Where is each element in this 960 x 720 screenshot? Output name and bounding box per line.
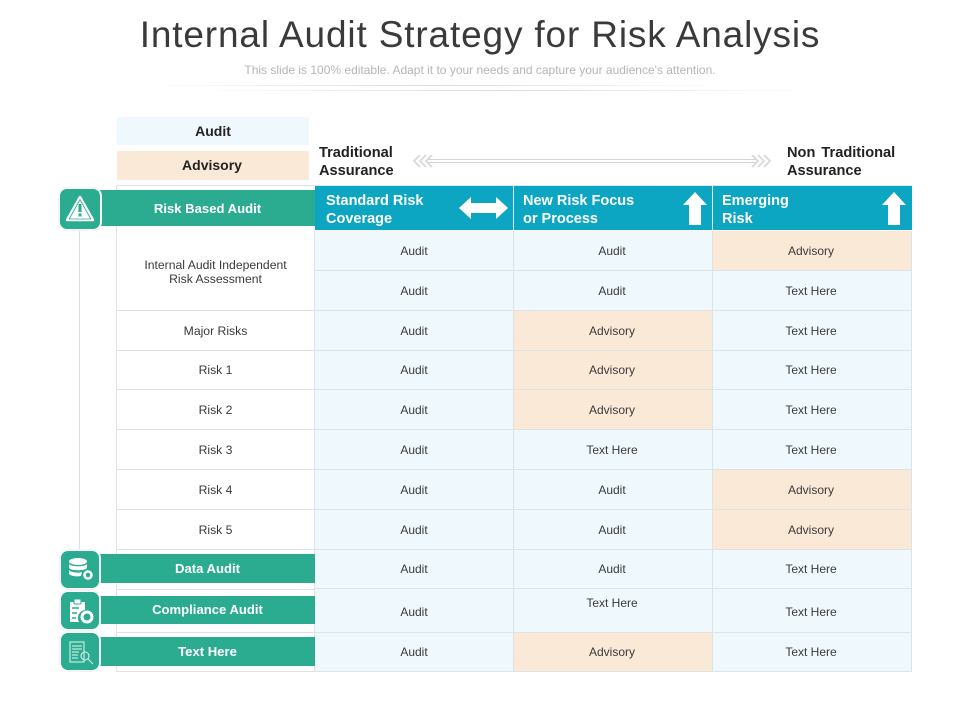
- data grid: Audit: [400, 482, 428, 496]
- header: emerging risk: Emerging: [722, 193, 789, 209]
- icon: database: [60, 550, 100, 589]
- band: text here: Text Here: [178, 644, 237, 659]
- data grid: Audit: [400, 562, 428, 576]
- data grid: Advisory: [788, 482, 834, 496]
- header row: [315, 186, 912, 230]
- left column cells: Risk 1: [199, 363, 232, 377]
- data grid: Text Here: [785, 562, 837, 576]
- data grid: Audit: [400, 604, 428, 618]
- data grid: Audit: [400, 522, 428, 536]
- label: non traditional assurance: Non Traditional: [787, 145, 895, 161]
- band: data audit: [100, 554, 315, 583]
- left column cells: Risk 5: [199, 522, 232, 536]
- band: risk based audit: [100, 190, 315, 226]
- header: emerging risk: Risk: [722, 211, 753, 227]
- label: traditional assurance: Traditional: [319, 145, 393, 161]
- arrow: assurance spectrum: [412, 154, 772, 168]
- icon: up arrow: [683, 192, 707, 225]
- data grid: Advisory: [589, 324, 635, 338]
- data grid: Text Here: [785, 363, 837, 377]
- data grid: Advisory: [589, 402, 635, 416]
- left column cells: Risk 3: [199, 442, 232, 456]
- label: traditional assurance: Assurance: [319, 163, 394, 179]
- data grid: Audit: [598, 482, 626, 496]
- legend: audit: [117, 117, 309, 145]
- label: non traditional assurance: [787, 145, 895, 179]
- data grid: Audit: [400, 244, 428, 258]
- header: standard risk coverage: Standard Risk: [326, 193, 424, 209]
- band: data audit: Data Audit: [175, 560, 240, 576]
- legend: audit: Audit: [195, 123, 231, 139]
- data grid: Text Here: [785, 402, 837, 416]
- data grid: Advisory: [788, 244, 834, 258]
- icon: document search: [60, 632, 100, 671]
- data grid: Audit: [400, 363, 428, 377]
- header: standard risk coverage: Coverage: [326, 211, 392, 227]
- header: new risk focus: [514, 186, 713, 230]
- label: traditional assurance: [319, 145, 394, 179]
- header: emerging risk: [713, 186, 912, 230]
- header: standard risk coverage: [315, 186, 514, 230]
- data grid: Audit: [400, 442, 428, 456]
- icon: clipboard gear: [60, 591, 100, 630]
- data grid: Text Here: [785, 284, 837, 298]
- band: compliance audit: [100, 596, 315, 624]
- data grid: Audit: [400, 324, 428, 338]
- data grid: Text Here: [785, 604, 837, 618]
- left column cells: Major Risks: [184, 324, 247, 338]
- data grid: Audit: [400, 645, 428, 659]
- data grid: Advisory: [589, 645, 635, 659]
- band: compliance audit: Compliance Audit: [152, 602, 263, 616]
- legend: advisory: Advisory: [182, 156, 242, 172]
- subtitle: This slide is 100% editable. Adapt it to your needs and capture your audience's attention.: [244, 63, 716, 77]
- data grid: Audit: [400, 284, 428, 298]
- left column cells: [117, 186, 315, 672]
- title: Internal Audit Strategy for Risk Analysis: [140, 14, 820, 55]
- table: [116, 185, 912, 672]
- icon: up arrow: [882, 192, 906, 225]
- band: risk based audit: Risk Based Audit: [154, 200, 261, 216]
- data grid: Text Here: [586, 596, 638, 610]
- left column cells: Internal Audit Independent: [144, 258, 287, 272]
- label: non traditional assurance: Assurance: [787, 163, 862, 179]
- icon: double arrow: [459, 197, 508, 219]
- icon: warning: [59, 188, 101, 230]
- data grid: Text Here: [785, 442, 837, 456]
- data grid: Text Here: [586, 442, 638, 456]
- band: text here: [100, 637, 315, 666]
- data grid: Audit: [598, 284, 626, 298]
- left column cells: Risk 2: [199, 402, 232, 416]
- data grid: Text Here: [785, 645, 837, 659]
- data grid: Advisory: [788, 522, 834, 536]
- legend: advisory: [117, 151, 309, 180]
- data grid: Advisory: [589, 363, 635, 377]
- left column cells: Risk 4: [199, 482, 232, 496]
- data grid: Audit: [400, 402, 428, 416]
- left column cells: Risk Assessment: [169, 272, 262, 286]
- data grid: [315, 231, 912, 672]
- data grid: Text Here: [785, 324, 837, 338]
- header: new risk focus: or Process: [523, 211, 598, 227]
- data grid: Audit: [598, 522, 626, 536]
- data grid: Audit: [598, 244, 626, 258]
- data grid: Audit: [598, 562, 626, 576]
- header: new risk focus: New Risk Focus: [523, 193, 634, 209]
